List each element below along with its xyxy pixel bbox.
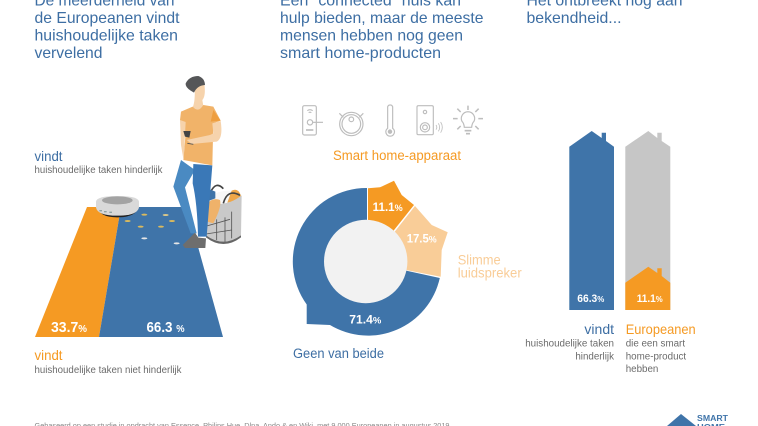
heading: column 2 xyxy=(280,0,484,62)
logo: Smart Home xyxy=(667,413,729,426)
heading: column 1: vervelend xyxy=(34,45,102,62)
icon: light bulb xyxy=(453,106,483,134)
man: neck and face xyxy=(193,84,205,113)
heading: column 3 xyxy=(526,0,682,27)
house bar: 66.3 percent: 66.3% xyxy=(577,293,605,305)
carpet value: 33.7 percent: 33.7% xyxy=(51,319,88,336)
man: front leg xyxy=(193,164,212,237)
label: vindt huishoudelijke taken hinderlijk: huishoudelijke taken hinderlijk xyxy=(34,165,163,176)
man: right arm xyxy=(187,121,221,144)
label: vindt niet hinderlijk: huishoudelijke taken niet hinderlijk xyxy=(34,365,182,376)
logo: Smart Home: SMART xyxy=(697,413,729,423)
basket: laundry inside xyxy=(208,191,241,207)
label: Europeanen die een smart home-product hebben: Europeanen xyxy=(626,321,696,337)
man: left arm xyxy=(180,120,186,161)
label: vindt niet hinderlijk: vindt xyxy=(34,347,63,363)
heading: column 1 xyxy=(34,0,180,62)
donut value: 71.4 percent: 71.4% xyxy=(349,314,381,326)
donut segment: slimme luidspreker xyxy=(394,206,448,277)
basket: back handle xyxy=(211,185,223,192)
heading: column 1: de Europeanen vindt xyxy=(34,10,180,27)
man: rear leg xyxy=(173,160,197,233)
basket: orange cloth front xyxy=(207,199,220,223)
grey house xyxy=(625,131,670,310)
house bar: 11.1 percent xyxy=(625,131,670,310)
carpet value: 66.3 percent: 66.3 % xyxy=(146,319,185,336)
carpet chart: 33.7 versus 66.3 percent xyxy=(35,207,223,337)
donut centre xyxy=(324,220,407,303)
label: Europeanen die een smart home-product hebben: home-product xyxy=(626,351,686,362)
label: Europeanen die een smart home-product hebben: die een smart xyxy=(626,339,685,350)
man: phone xyxy=(183,131,191,138)
man: shirt xyxy=(180,105,221,165)
man: hair xyxy=(186,76,205,93)
label: Slimme luidspreker xyxy=(458,252,522,280)
label: Europeanen die een smart home-product hebben: hebben xyxy=(626,364,658,375)
icon: robot vacuum xyxy=(339,112,363,136)
carpet segment: niet hinderlijk xyxy=(35,207,121,337)
illustration: man with phone xyxy=(173,76,221,248)
label: vindt huishoudelijke taken hinderlijk xyxy=(34,148,163,176)
orange house xyxy=(625,267,670,310)
donut value: 11.1 percent: 11.1% xyxy=(373,202,403,214)
label: Europeanen die een smart home-product hebben xyxy=(626,321,696,375)
donut segment: geen van beide xyxy=(293,188,440,336)
label: Geen van beide: Geen van beide xyxy=(293,346,384,361)
label: vindt huishoudelijke taken hinderlijk (house): hinderlijk xyxy=(575,351,614,362)
label: vindt huishoudelijke taken hinderlijk: vindt xyxy=(34,148,63,164)
label: vindt huishoudelijke taken hinderlijk (house): huishoudelijke taken xyxy=(525,339,614,350)
label: Slimme luidspreker: luidspreker xyxy=(458,265,522,280)
illustration: laundry basket xyxy=(206,185,242,244)
man: phone shadow xyxy=(187,142,193,146)
label: Slimme luidspreker: Slimme xyxy=(458,252,501,267)
heading: column 2: mensen hebben nog geen xyxy=(280,28,463,44)
label: vindt huishoudelijke taken hinderlijk (house) xyxy=(525,321,614,362)
heading: column 2: hulp bieden, maar de meeste xyxy=(280,10,484,27)
illustration: crumbs on carpet xyxy=(125,214,180,244)
basket: blue cloth xyxy=(207,188,215,201)
icon: video doorbell xyxy=(417,106,442,135)
man: sleeve shadow xyxy=(211,110,221,122)
heading: column 3: bekendheid... xyxy=(526,10,622,27)
donut segment: smart home-apparaat xyxy=(368,181,414,231)
donut value: 17.5 percent: 17.5% xyxy=(407,233,437,245)
label: vindt huishoudelijke taken hinderlijk (house): vindt xyxy=(584,321,614,337)
illustration: robot vacuum xyxy=(96,196,139,217)
donut chart xyxy=(293,181,448,336)
basket: grid xyxy=(206,212,232,242)
icon: thermometer xyxy=(386,105,394,136)
house bar: 66.3 percent xyxy=(569,131,614,310)
heading: column 1: huishoudelijke taken xyxy=(34,28,178,44)
house value: 11.1% xyxy=(637,293,663,305)
man: shoes xyxy=(183,233,206,248)
carpet segment: hinderlijk xyxy=(99,207,223,337)
basket: body xyxy=(206,195,242,243)
basket: rim shadow xyxy=(206,235,241,244)
basket: front handle xyxy=(223,193,240,203)
icon: smart lock xyxy=(303,106,323,135)
icons: smart home devices xyxy=(303,105,483,136)
heading: column 2: smart home-producten xyxy=(280,45,441,62)
label: vindt niet hinderlijk xyxy=(34,347,182,376)
label: Smart home-apparaat: Smart home-apparaat xyxy=(333,148,461,163)
basket: orange cloth right xyxy=(227,190,241,203)
